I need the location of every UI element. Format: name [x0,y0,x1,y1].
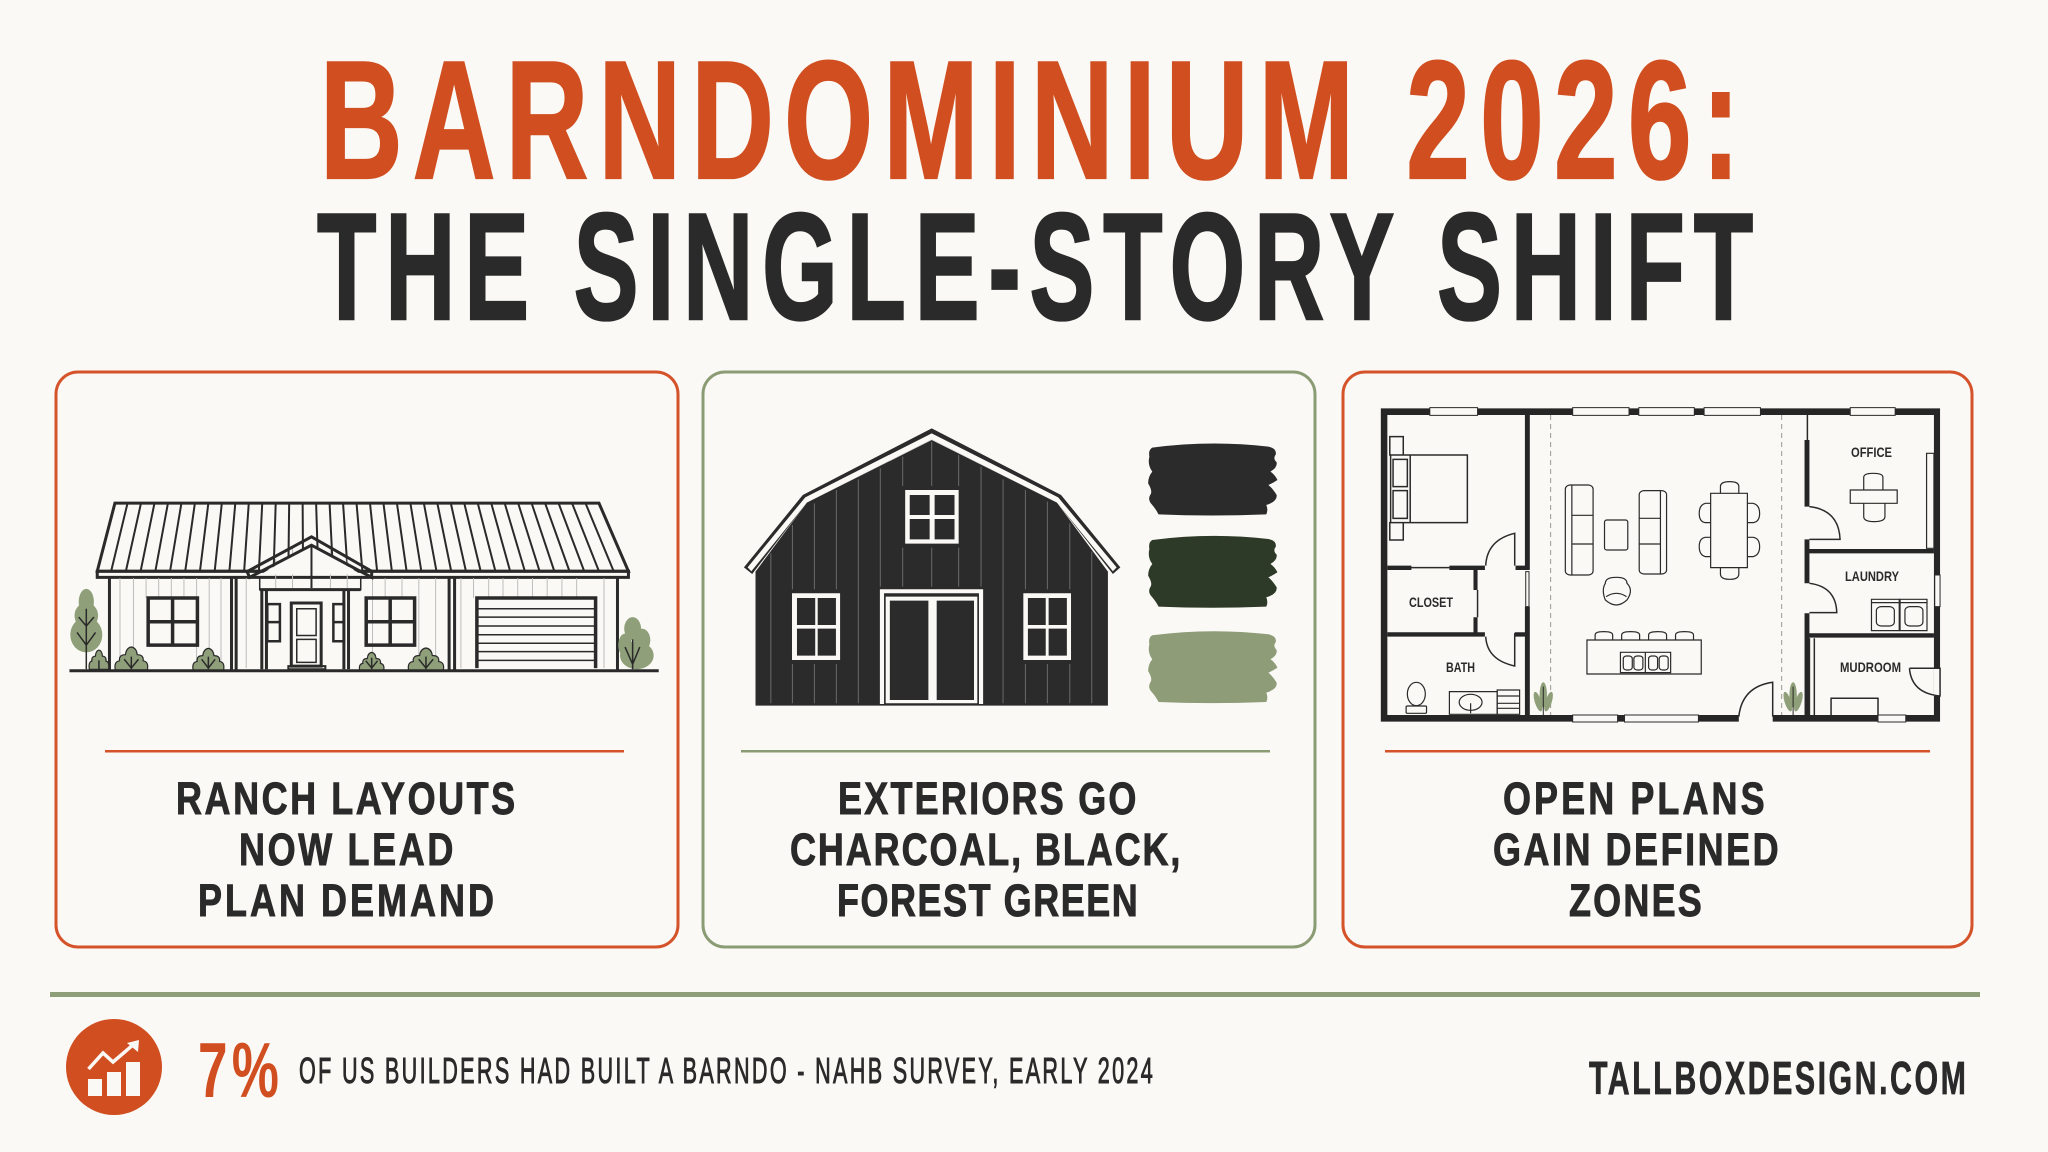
dining table [1699,482,1760,579]
divider [741,750,1270,752]
caption [176,773,515,926]
panel: ranch layouts [56,372,678,947]
icon: growth chart [66,1019,162,1115]
caption: EXTERIORS GO [838,773,1136,824]
swatch: sage [1148,631,1277,703]
siding lines [771,442,1092,703]
caption [1493,773,1779,926]
barn body [756,440,1108,706]
laundry machines [1871,599,1927,631]
attic window [899,486,964,548]
roof trim highlight [748,433,1117,571]
swatch: charcoal [1148,444,1277,515]
roof trim [744,428,1120,574]
illustration: floor plan [1381,408,1941,722]
room label: closet: CLOSET [1409,594,1453,610]
caption: NOW LEAD [239,824,453,875]
siding [120,578,604,668]
windows [148,598,415,645]
title [317,27,1753,352]
double doors [874,587,989,704]
card border [703,372,1315,947]
plants [1532,682,1805,715]
floor plan drawing [1381,408,1941,722]
front gable [247,537,372,669]
office furniture [1850,453,1934,548]
door swings [1411,415,1940,717]
title line 2: THE SINGLE-STORY SHIFT [317,182,1753,352]
illustration: dark barn [744,428,1277,706]
panel: open plans [1343,372,1972,947]
bedroom furniture [1390,437,1467,540]
kitchen island [1587,632,1701,674]
footer rule [50,992,1980,997]
bath fixtures [1406,682,1520,714]
ground line [69,669,659,672]
panel: exterior colors [703,372,1315,947]
zone dashes [1551,415,1782,715]
caption: RANCH LAYOUTS [176,773,515,824]
room label: bath: BATH [1446,659,1475,675]
illustration: ranch house [69,503,659,671]
right window [1018,589,1077,664]
website: TALLBOXDESIGN.COM [1589,1054,1966,1105]
caption: ZONES [1569,875,1702,926]
windows and openings [1430,408,1941,722]
door [267,603,344,669]
shrubs [89,647,444,671]
room label: mudroom: MUDROOM [1840,659,1901,675]
footer stat [66,1019,1153,1115]
living furniture [1565,485,1667,605]
tree left [70,589,102,669]
card border [56,372,678,947]
caption [790,773,1180,926]
divider [1385,750,1930,752]
caption: PLAN DEMAND [198,875,494,926]
tree right [618,617,654,669]
garage door [477,598,596,668]
walls and posts [109,577,617,670]
caption: OPEN PLANS [1503,773,1765,824]
card border [1343,372,1972,947]
left window [786,589,846,664]
stat description: OF US BUILDERS HAD BUILT A BARNDO - NAHB SURVEY, EARLY 2024 [299,1051,1153,1091]
caption: FOREST GREEN [837,875,1138,926]
divider [105,750,624,752]
caption: GAIN DEFINED [1493,824,1779,875]
mudroom bench [1831,698,1878,715]
room label: office: OFFICE [1851,444,1892,460]
interior walls [1387,415,1934,715]
swatch: forest green [1148,536,1277,608]
caption: CHARCOAL, BLACK, [790,824,1180,875]
walls [1381,408,1940,722]
roof [97,503,628,577]
stat number: 7% [198,1028,279,1115]
room label: laundry: LAUNDRY [1845,568,1900,584]
title line 1: BARNDOMINIUM 2026: [320,27,1740,214]
